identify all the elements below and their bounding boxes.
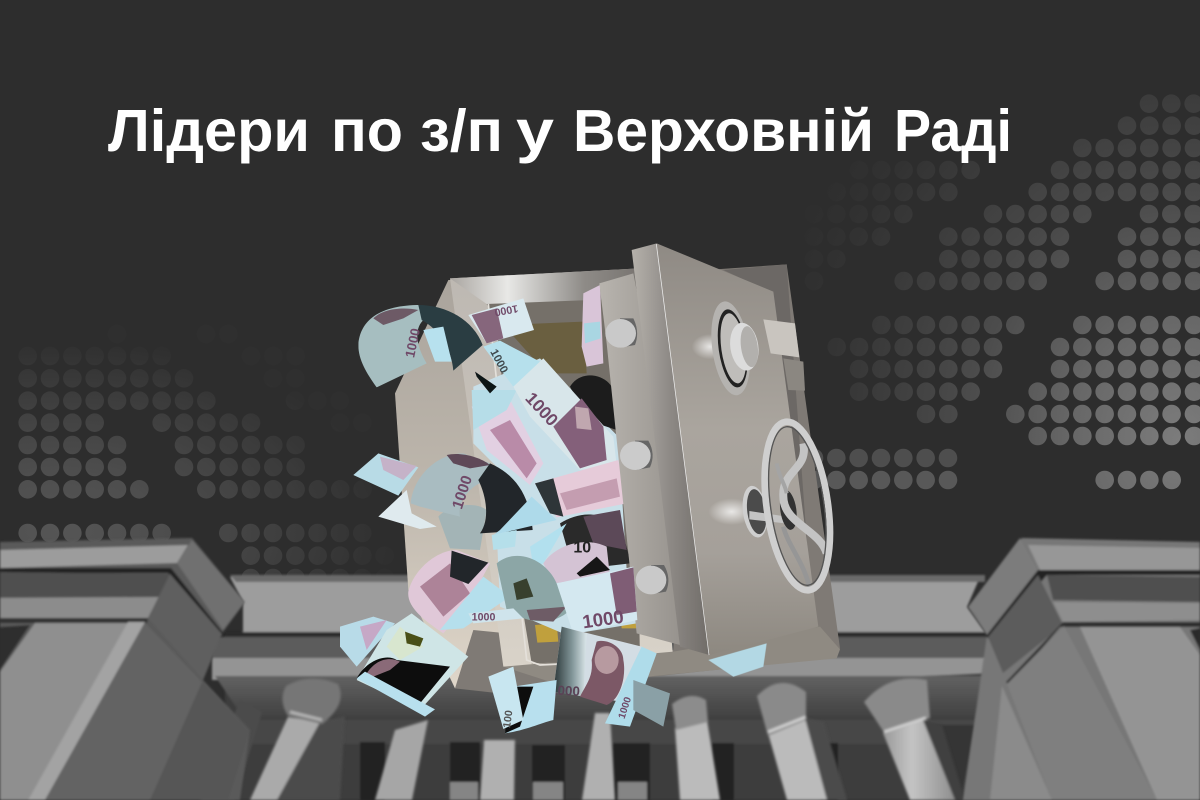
title: по: [331, 98, 403, 164]
note: bottom right with portrait: 1000: [550, 682, 580, 699]
safe body: [395, 264, 840, 693]
note: bottom right with portrait: [550, 627, 670, 727]
columns of the colonnade: [250, 678, 965, 800]
spoked wheel: [755, 418, 840, 594]
windows: [360, 742, 838, 800]
banknotes behind the door: 10: [573, 540, 591, 557]
title: [108, 98, 1012, 164]
door inner panel: [599, 273, 707, 653]
parliament building photo: [200, 575, 1002, 800]
colonnade recess: [225, 675, 985, 800]
flying banknotes in front: 1000: [487, 347, 510, 375]
banknotes behind the door: [472, 285, 637, 635]
combination dial: [706, 299, 762, 398]
right side and bottom: [455, 264, 840, 693]
note: lower centre with numerals: [557, 567, 637, 634]
note: bottom centre: 100: [501, 709, 515, 729]
note: under the door: [708, 643, 767, 677]
central entablature: [230, 577, 987, 635]
right wing: [963, 538, 1200, 800]
note: top-left curl: 1000: [402, 327, 423, 359]
handle hole: [739, 484, 787, 539]
title: Раді: [894, 98, 1012, 164]
title: у: [516, 98, 554, 164]
interior: [487, 298, 640, 663]
left side face: [395, 280, 503, 688]
note: top-left curl: 1000: [493, 302, 519, 318]
left and right wings of the building: [0, 538, 1200, 800]
title: Лідери: [108, 98, 310, 164]
note: lower roll: 1000: [472, 612, 495, 624]
title: з/п: [420, 98, 503, 164]
banknote mass inside the safe: [473, 358, 637, 635]
door bolts: [605, 318, 668, 594]
latch: [763, 319, 799, 357]
note: left curl: [353, 453, 557, 550]
door front: [657, 243, 818, 655]
note: bottom centre: [488, 667, 557, 733]
safe door: [599, 243, 840, 655]
note: lower centre with numerals: 1000: [581, 606, 625, 632]
door edge: [632, 243, 709, 655]
dotted world map, right part: [814, 104, 1195, 480]
dotted world map, left part: [28, 334, 385, 578]
note: bottom right with portrait: 1000: [617, 695, 634, 720]
recess walls: [963, 682, 997, 800]
note: left curl: 1000: [449, 474, 476, 511]
title: Верховній: [573, 98, 874, 164]
flying banknotes in front: [340, 298, 767, 733]
front frame: [450, 268, 673, 667]
safe and flying banknotes: [340, 243, 840, 733]
left wing: [0, 538, 250, 800]
note: top-left curl: [358, 298, 534, 387]
note: lower roll: [408, 550, 570, 633]
note: centre, large with portrait numerals: 1000: [521, 388, 562, 430]
soffit: [215, 676, 1000, 720]
note: bottom left: [340, 613, 468, 717]
